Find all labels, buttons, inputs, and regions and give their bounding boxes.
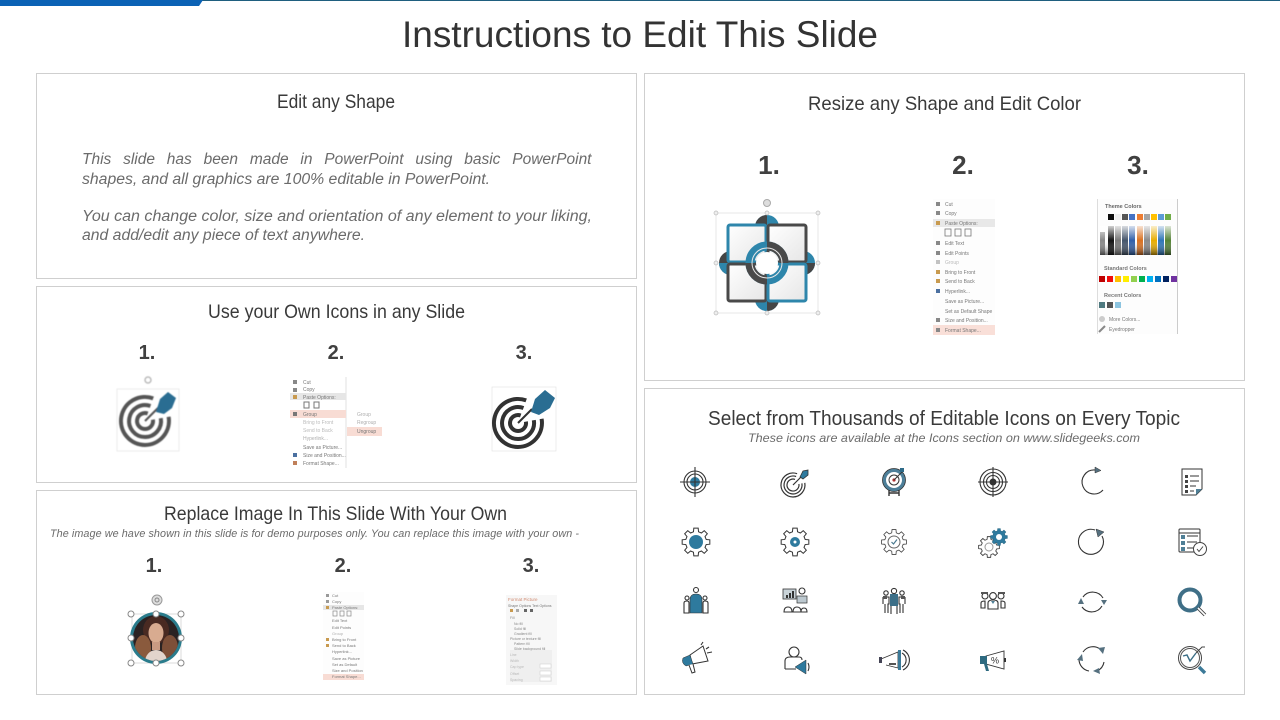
icon: person with megaphone	[785, 647, 809, 674]
icon: two-arrow cycle	[1078, 592, 1107, 612]
icon: business team	[883, 588, 905, 614]
context menu: format shape: Edit Text	[945, 241, 965, 247]
context menu: format shape: Size and Position...	[945, 318, 988, 324]
icon: three people	[981, 592, 1005, 609]
context menu: format shape: Group	[945, 260, 959, 266]
icon: crosshair target	[680, 467, 710, 497]
color picker menu	[1097, 199, 1178, 334]
context menu: group	[290, 377, 382, 468]
heading: use your own icons: Use your Own Icons in any Slide	[208, 301, 465, 323]
image: circular portrait	[128, 595, 184, 674]
title: Instructions to Edit This Slide	[402, 14, 878, 55]
icon: magnifier	[1180, 590, 1205, 615]
context menu: group: Copy	[303, 387, 315, 393]
context menu: format picture: Cut	[332, 593, 339, 598]
icon: open circular arrow	[1082, 467, 1103, 494]
context menu: group: Ungroup	[357, 429, 376, 435]
step numbers: 1.	[139, 342, 155, 364]
context menu: format shape: Set as Default Shape	[945, 309, 992, 315]
context menu: format picture: Send to Back	[332, 643, 356, 648]
top accent bar	[0, 0, 1280, 6]
icon: pair of gears	[979, 529, 1007, 557]
context menu: format shape: Hyperlink...	[945, 289, 970, 295]
context menu: group: Format Shape...	[303, 461, 339, 467]
subheading: icons source: These icons are available at the Icons section on www.slidegeeks.com	[748, 431, 1140, 445]
heading: select icons: Select from Thousands of Editable Icons on Every Topic	[708, 407, 1180, 430]
step numbers: 2.	[328, 342, 344, 364]
panel: edit any shape	[36, 74, 636, 278]
context menu: format shape: Save as Picture...	[945, 299, 984, 305]
format picture pane: Width	[510, 659, 519, 663]
text block: instructions	[82, 151, 592, 244]
format picture pane: Offset	[510, 672, 519, 676]
context menu: format picture: Size and Position	[332, 668, 363, 673]
text block: instructions: and add/edit any piece of text anywhere.	[82, 227, 365, 244]
context menu: format picture: Edit Points	[332, 625, 351, 630]
format picture pane: Pattern fill	[514, 642, 530, 646]
format picture pane: No fill	[514, 622, 523, 626]
context menu: format picture: Hyperlink...	[332, 649, 352, 654]
step numbers: 1.	[758, 150, 780, 180]
text block: instructions: You can change color, size and orientation of any element to your liking,	[82, 208, 592, 225]
heading: edit any shape: Edit any Shape	[277, 91, 395, 113]
color picker menu: Eyedropper	[1109, 327, 1135, 333]
panel: replace image	[36, 490, 636, 694]
context menu: format shape: Cut	[945, 202, 953, 208]
panel: use your own icons	[36, 286, 636, 482]
context menu: group: Hyperlink...	[303, 436, 328, 442]
panel: editable icons	[644, 388, 1244, 694]
format picture pane: Format Picture	[508, 597, 538, 602]
context menu: format picture: Paste Options:	[332, 605, 358, 610]
context menu: group: Bring to Front	[303, 420, 334, 426]
color picker menu: Recent Colors	[1104, 293, 1141, 299]
icon: megaphone side	[879, 650, 909, 670]
step numbers: 1.	[146, 555, 162, 577]
context menu: format shape	[933, 199, 995, 335]
icon: percent megaphone	[980, 651, 1006, 671]
icon: archery target on stand	[882, 468, 906, 496]
context menu: format picture: Bring to Front	[332, 637, 357, 642]
step numbers: 2.	[952, 150, 974, 180]
context menu: group: Group	[357, 412, 371, 418]
heading: replace image: Replace Image In This Slide With Your Own	[164, 503, 507, 525]
format picture pane: Slide background fill	[514, 647, 546, 651]
context menu: format picture	[323, 592, 364, 680]
icon: fine crosshair target	[978, 467, 1008, 497]
icon: megaphone with sparks	[682, 642, 712, 673]
context menu: format shape: Send to Back	[945, 279, 975, 285]
text block: instructions: This slide has been made in PowerPoint using basic PowerPoint	[82, 151, 592, 168]
format picture pane: Picture or texture fill	[510, 637, 541, 641]
context menu: group: Size and Position...	[303, 453, 346, 459]
step numbers: 3.	[1127, 150, 1149, 180]
context menu: group: Regroup	[357, 420, 376, 426]
step numbers: 2.	[335, 555, 351, 577]
context menu: group: Cut	[303, 380, 311, 386]
context menu: format shape: Format Shape...	[945, 328, 981, 334]
context menu: group: Group	[303, 412, 317, 418]
format picture pane: Spacing	[510, 678, 523, 682]
context menu: format shape: Copy	[945, 211, 957, 217]
icon: browser checklist	[1179, 529, 1206, 556]
icon: magnifier with chart	[1178, 646, 1205, 673]
icon: target selected grey	[117, 377, 179, 451]
context menu: format picture: Group	[332, 631, 344, 636]
context menu: format picture: Save as Picture	[332, 656, 361, 661]
step numbers	[139, 342, 532, 364]
icon: target selected dark	[492, 387, 556, 451]
format picture pane	[506, 595, 557, 685]
format picture pane: Gradient fill	[514, 632, 532, 636]
color picker menu: Theme Colors	[1105, 204, 1142, 210]
text block: instructions: shapes, and all graphics are 100% editable in PowerPoint.	[82, 171, 490, 188]
context menu: format picture: Set as Default	[332, 662, 358, 667]
format picture pane: Shape Options Text Options	[508, 604, 552, 608]
graphic: four-square shape	[714, 200, 820, 315]
icon: circular arrow closed	[1078, 529, 1104, 554]
format picture pane: Cap type	[510, 665, 524, 669]
icon: gear with check	[882, 530, 906, 554]
step numbers	[758, 150, 1149, 180]
context menu: group: Paste Options:	[303, 395, 336, 401]
color picker menu: More Colors...	[1109, 317, 1140, 323]
step numbers: 3.	[523, 555, 539, 577]
icon: target with arrow	[781, 470, 808, 497]
context menu: format shape: Edit Points	[945, 251, 969, 257]
context menu: format shape: Paste Options:	[945, 221, 978, 227]
icon: group leader	[684, 588, 708, 613]
heading: resize shape: Resize any Shape and Edit Color	[808, 93, 1081, 115]
context menu: format picture: Format Shape...	[332, 674, 361, 679]
panel: resize shape and edit color	[644, 74, 1244, 380]
context menu: group: Save as Picture...	[303, 445, 342, 451]
format picture pane: Fill	[510, 616, 515, 620]
icon: presentation	[783, 588, 807, 612]
format picture pane: Solid fill	[514, 627, 526, 631]
step numbers	[146, 555, 539, 577]
icon: gear with solid center	[682, 528, 710, 556]
icon: gear with ring center	[781, 528, 809, 556]
context menu: format picture: Edit Text	[332, 618, 348, 623]
context menu: format picture: Copy	[332, 599, 341, 604]
icon: three-arrow cycle	[1077, 647, 1105, 674]
step numbers: 3.	[516, 342, 532, 364]
context menu: format shape: Bring to Front	[945, 270, 976, 276]
format picture pane: Line	[510, 653, 517, 657]
subheading: replace image note: The image we have shown in this slide is for demo purposes only. You can replace this image with your own -	[50, 528, 579, 540]
icon: percent megaphone: %	[991, 656, 999, 666]
color picker menu: Standard Colors	[1104, 266, 1147, 272]
icon: checklist document	[1182, 469, 1202, 495]
context menu: group: Send to Back	[303, 428, 333, 434]
